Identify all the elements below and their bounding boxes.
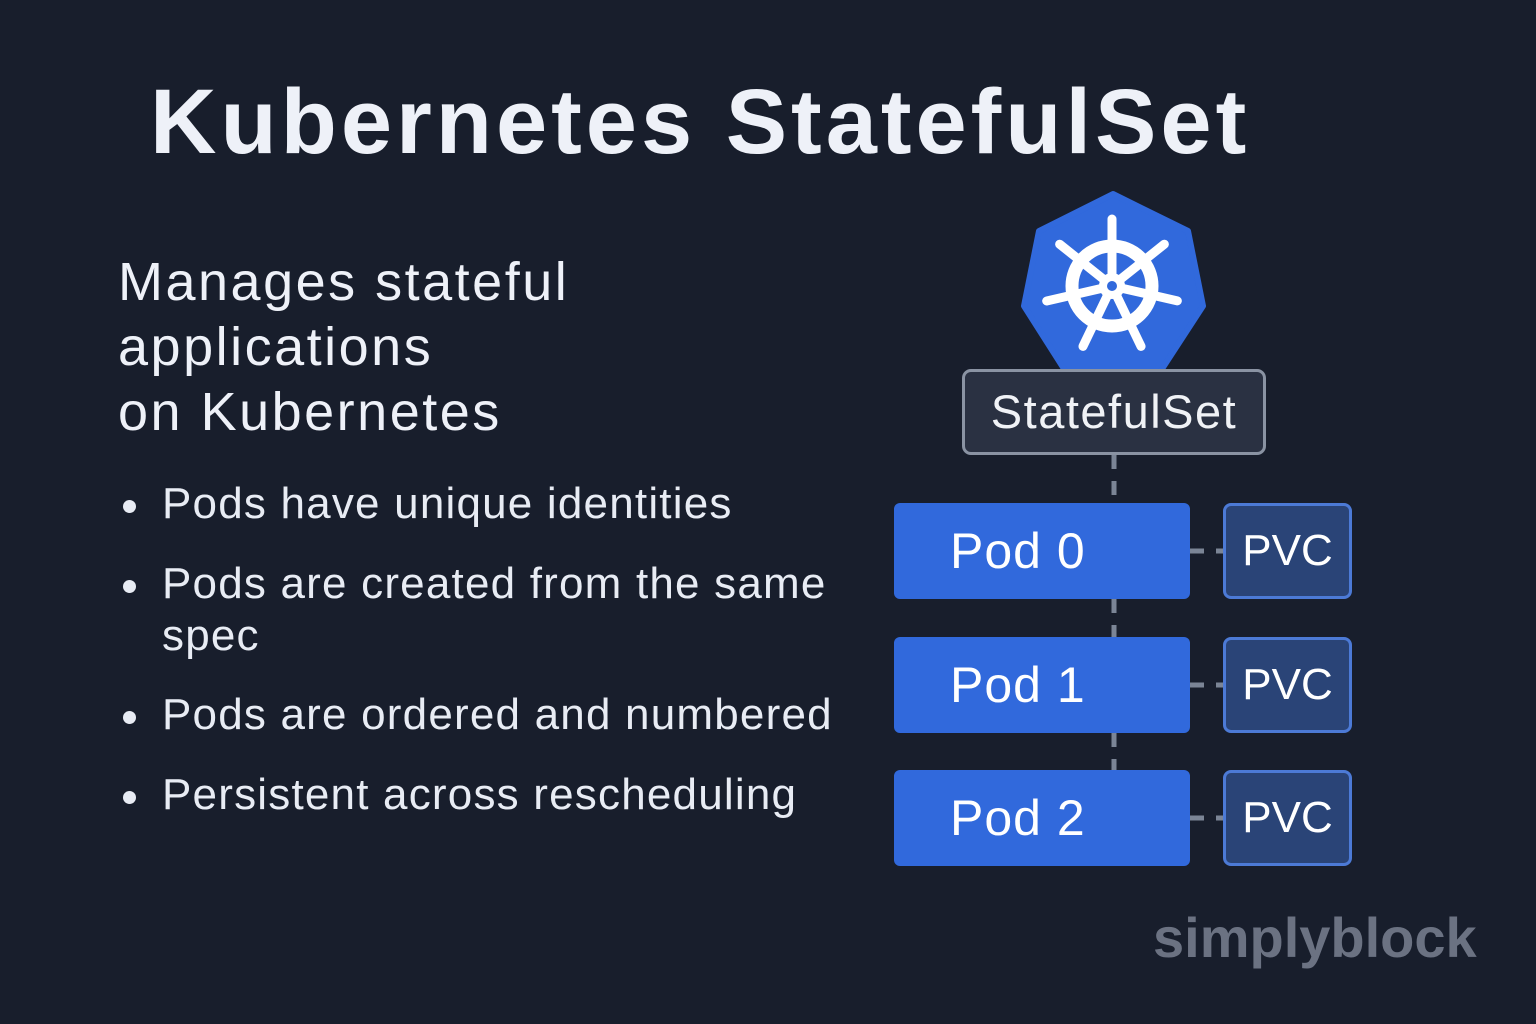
pvc 1 [1223, 637, 1352, 733]
pvc 2: PVC [1242, 793, 1333, 842]
statefulset box [962, 369, 1266, 455]
pvc 1: PVC [1242, 660, 1333, 709]
icon: kubernetes logo [1021, 191, 1206, 369]
pvc 2 [1223, 770, 1352, 866]
bullet list [123, 479, 833, 819]
pod 2: Pod 2 [950, 790, 1086, 846]
bullet 2: spec [162, 611, 260, 660]
statefulset box: StatefulSet [991, 385, 1237, 438]
pvc 0: PVC [1242, 526, 1333, 575]
pvc 0 [1223, 503, 1352, 599]
bullet 2: Pods are created from the same [162, 559, 827, 608]
subtitle: applications [118, 317, 433, 377]
pod 1 [894, 637, 1190, 733]
bullet 1: Pods have unique identities [162, 479, 733, 528]
bullet 3: Pods are ordered and numbered [162, 690, 833, 739]
title: Kubernetes StatefulSet [150, 71, 1250, 173]
bullet 2 [118, 558, 827, 662]
bullet 4: Persistent across rescheduling [162, 770, 797, 819]
brand: simplyblock: simplyblock [1153, 906, 1477, 969]
subtitle [118, 252, 569, 442]
subtitle: on Kubernetes [118, 382, 502, 442]
pod 1: Pod 1 [950, 657, 1086, 713]
pod 0 [894, 503, 1190, 599]
subtitle: Manages stateful [118, 252, 569, 312]
pod 2 [894, 770, 1190, 866]
pod 0: Pod 0 [950, 523, 1086, 579]
